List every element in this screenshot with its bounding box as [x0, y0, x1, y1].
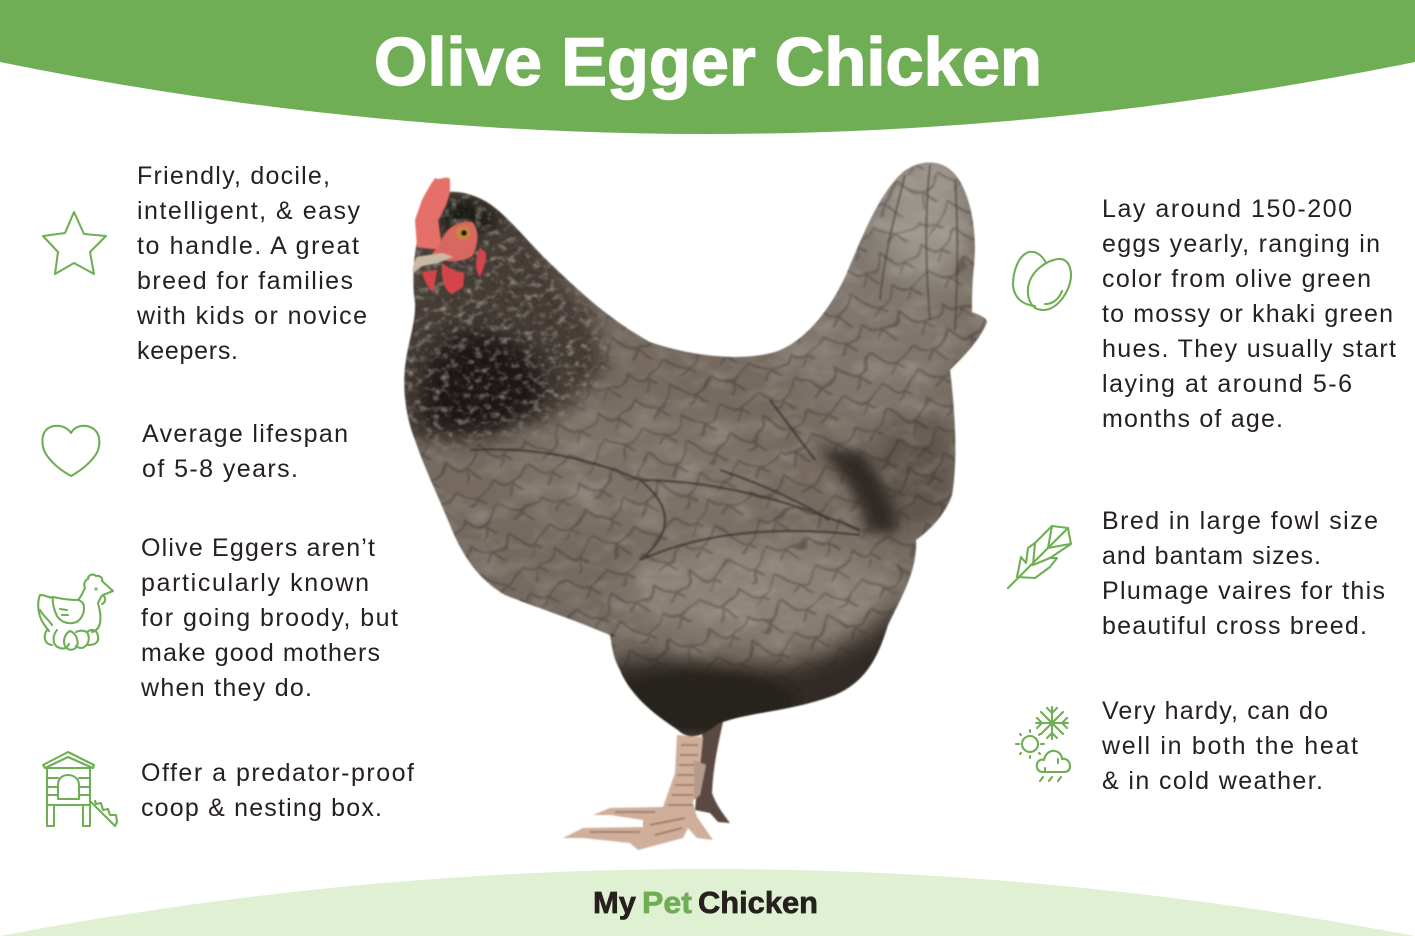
- text: egg laying: color from olive green: [1102, 265, 1371, 293]
- text: plumage: beautiful cross breed.: [1102, 612, 1367, 640]
- text: coop: [141, 759, 414, 822]
- text: plumage: Bred in large fowl size: [1102, 507, 1378, 535]
- text: egg laying: months of age.: [1102, 405, 1283, 433]
- title: Olive Egger Chicken: [374, 24, 1042, 100]
- text: broodiness: make good mothers: [141, 639, 380, 667]
- text: temperament: [136, 162, 367, 365]
- text: temperament: to handle. A great: [137, 232, 359, 260]
- text: egg laying: hues. They usually start: [1102, 335, 1396, 363]
- icon: chicken coop: [43, 752, 117, 826]
- tail feathers: [880, 165, 957, 330]
- text: egg laying: Lay around 150-200: [1102, 195, 1352, 223]
- chicken head: [413, 178, 486, 294]
- text: hardiness: Very hardy, can do: [1102, 697, 1328, 725]
- text: plumage: and bantam sizes.: [1102, 542, 1321, 570]
- text: lifespan: Average lifespan: [142, 420, 348, 448]
- icon: eggs: [1013, 252, 1071, 310]
- text: coop: Offer a predator-proof: [141, 759, 414, 787]
- text: broodiness: [140, 534, 398, 702]
- text: plumage: Plumage vaires for this: [1102, 577, 1385, 605]
- text: temperament: intelligent, & easy: [137, 197, 360, 225]
- logo: Pet: [642, 885, 692, 920]
- chicken face and eye: [432, 222, 477, 261]
- text: hardiness: & in cold weather.: [1102, 767, 1323, 795]
- header banner: [0, 0, 1415, 134]
- text: hardiness: well in both the heat: [1101, 732, 1358, 760]
- logo: Chicken: [698, 885, 818, 920]
- footer banner: [0, 869, 1415, 936]
- icon: feather: [1008, 526, 1071, 588]
- text: egg laying: eggs yearly, ranging in: [1102, 230, 1380, 258]
- text: egg laying: laying at around 5-6: [1102, 370, 1352, 398]
- text: broodiness: when they do.: [140, 674, 312, 702]
- icon: broody hen on eggs: [38, 575, 113, 650]
- text: temperament: with kids or novice: [136, 302, 367, 330]
- text: coop: coop & nesting box.: [141, 794, 382, 822]
- chicken legs: [563, 722, 730, 850]
- text: plumage: [1102, 507, 1385, 640]
- text: broodiness: particularly known: [141, 569, 369, 597]
- logo: My: [593, 885, 637, 920]
- text: egg laying: to mossy or khaki green: [1102, 300, 1393, 328]
- text: lifespan: of 5-8 years.: [142, 455, 298, 483]
- icon: star: [43, 212, 106, 274]
- text: hardiness: [1101, 697, 1358, 795]
- text: egg laying: [1102, 195, 1396, 433]
- chicken comb: [415, 178, 450, 250]
- chicken body: [380, 150, 995, 750]
- logo: [593, 885, 818, 920]
- chicken photo illustration: [380, 150, 995, 850]
- text: temperament: breed for families: [137, 267, 353, 295]
- wing and feather contours: [470, 400, 860, 636]
- chicken wattle: [422, 248, 486, 294]
- text: temperament: keepers.: [137, 337, 238, 365]
- text: lifespan: [142, 420, 348, 483]
- icon: weather: [1016, 707, 1070, 781]
- text: broodiness: Olive Eggers aren’t: [141, 534, 375, 562]
- text: broodiness: for going broody, but: [141, 604, 398, 632]
- icon: heart: [42, 426, 99, 476]
- chicken beak: [413, 253, 453, 273]
- text: temperament: Friendly, docile,: [137, 162, 330, 190]
